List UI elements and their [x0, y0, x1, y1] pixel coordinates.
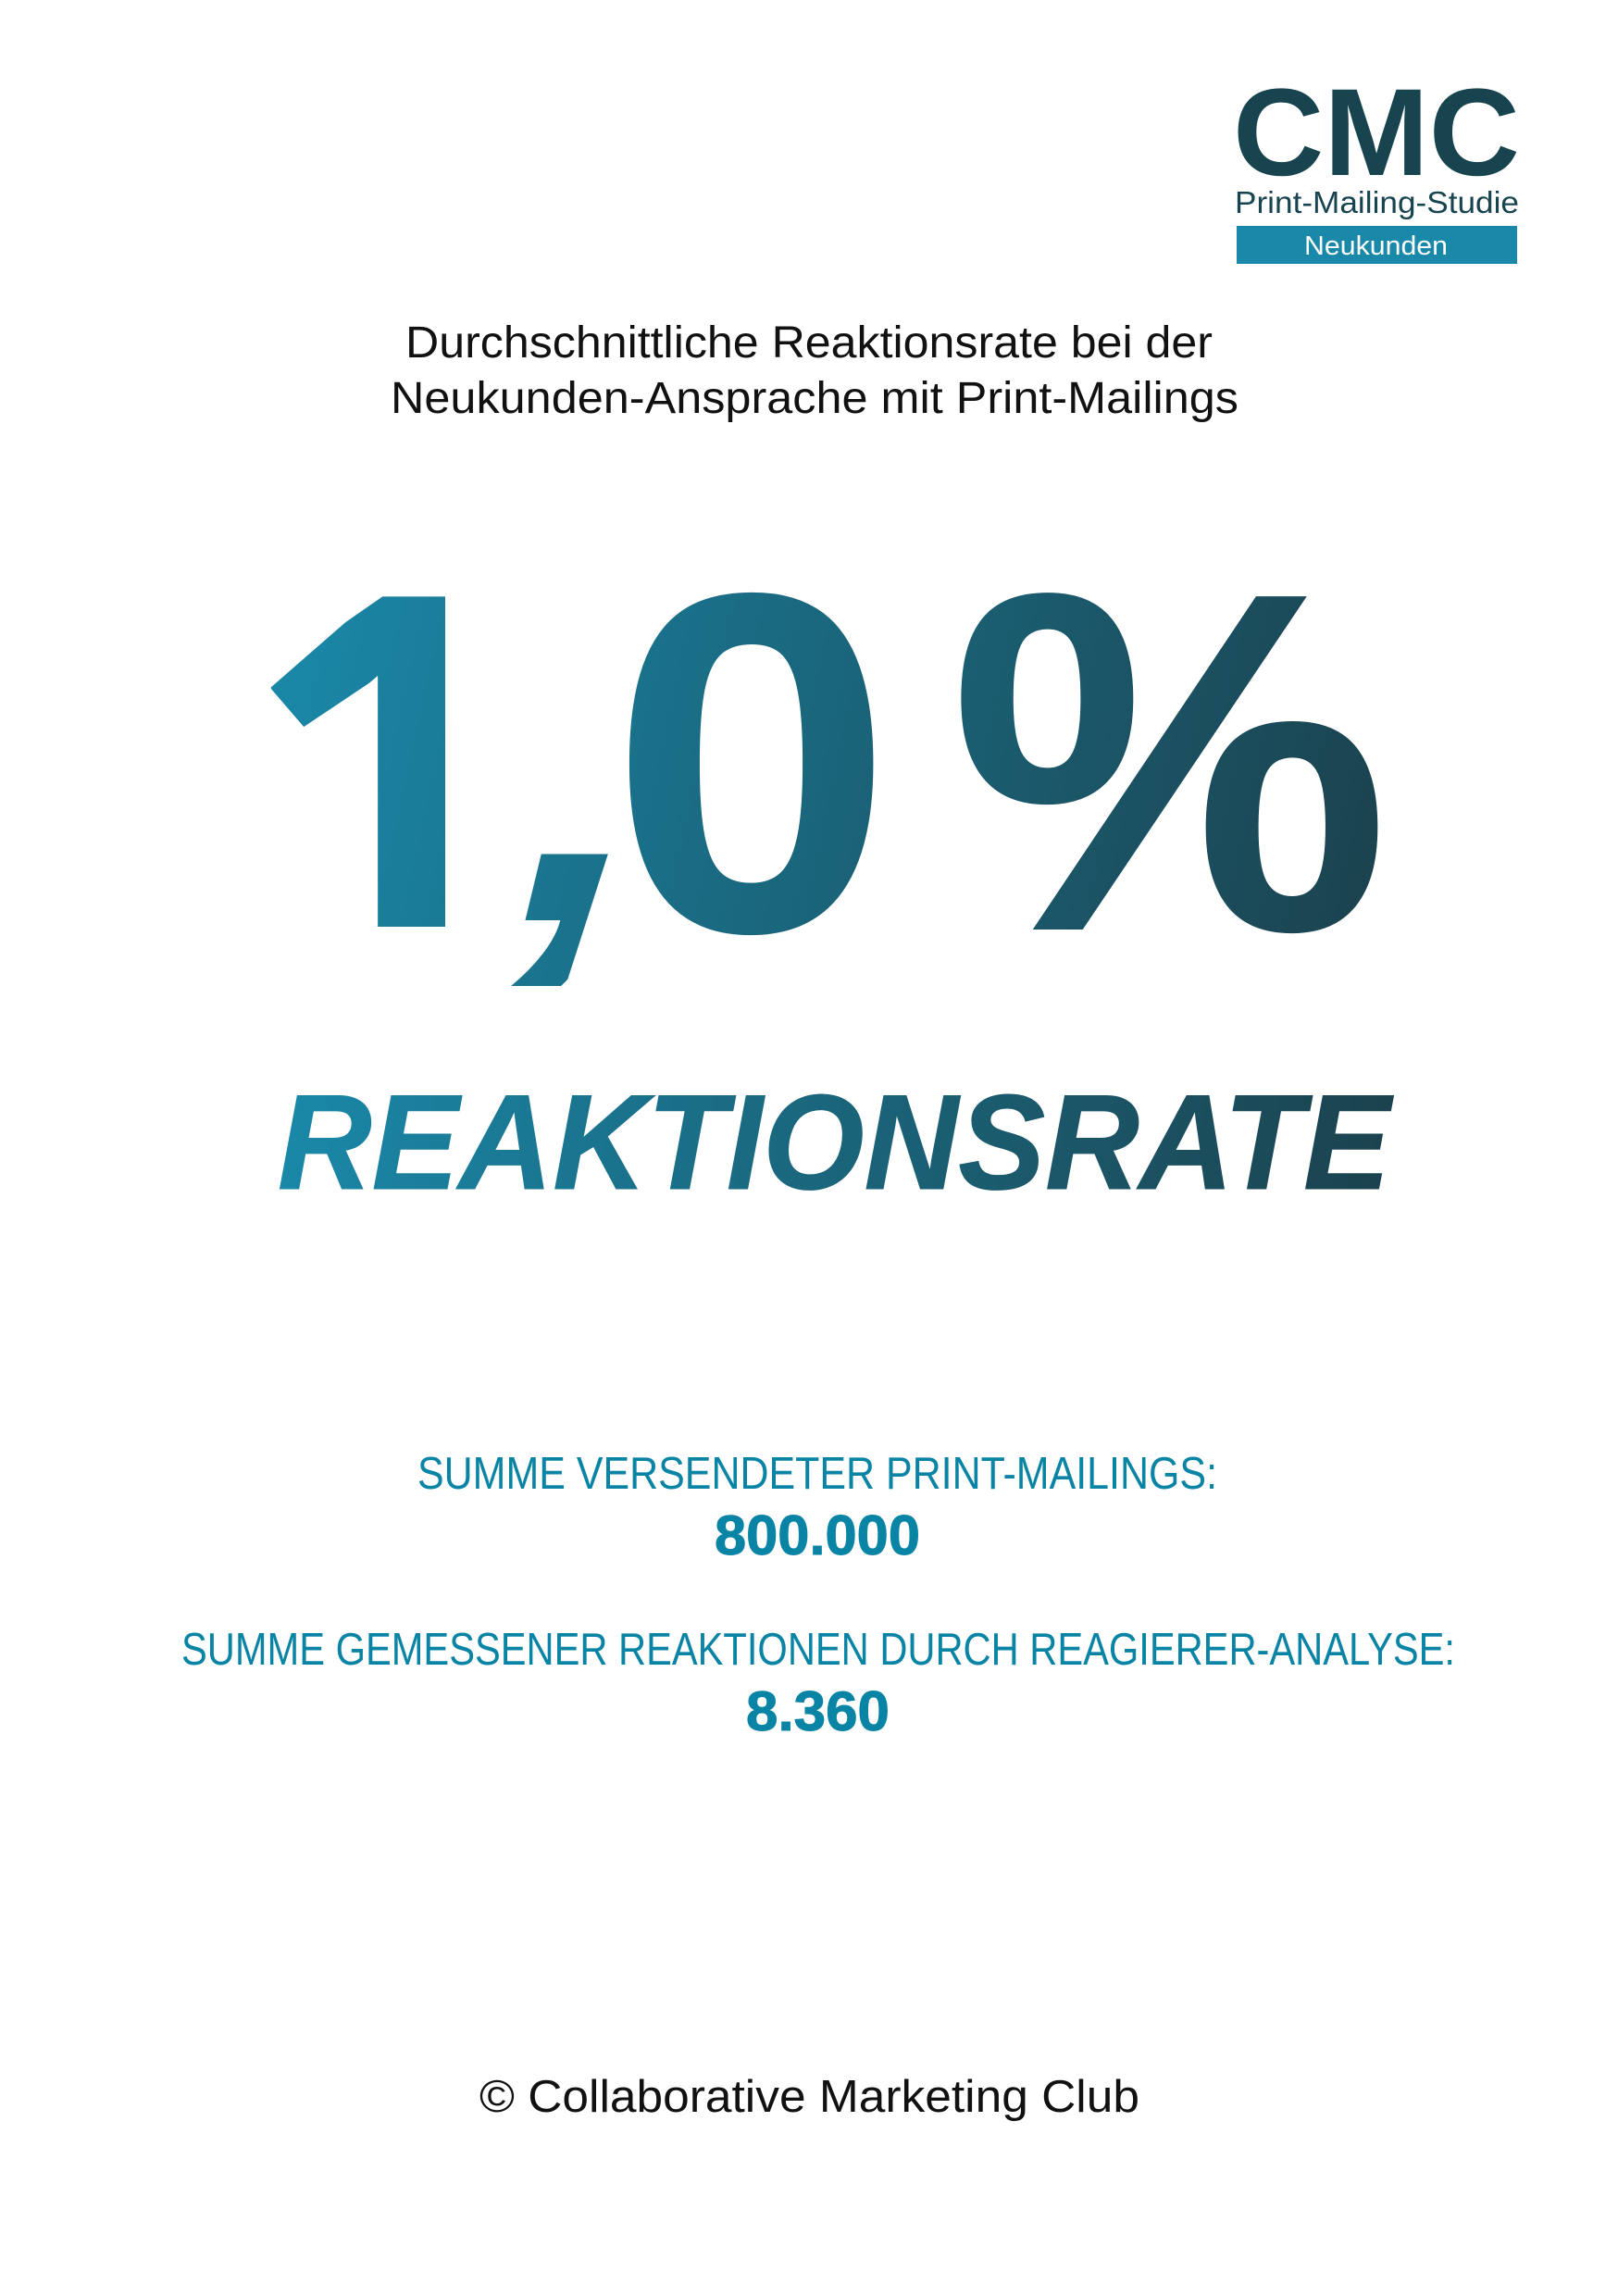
stat: versendete Print-Mailings [417, 1449, 1217, 1566]
big number: 1,0%: % [949, 492, 1390, 1032]
big number: 1,0%: , [504, 518, 667, 1015]
subtitle: Neukunden-Ansprache mit Print-Mailings [391, 374, 1238, 423]
big number: 1,0% [270, 593, 1377, 986]
logo [1233, 64, 1520, 264]
logo: Neukunden bar: Neukunden [1304, 231, 1448, 261]
copyright footer: © Collaborative Marketing Club [479, 2072, 1139, 2122]
big number: 1,0%: 0 [609, 493, 894, 1034]
stat: gemessene Reaktionen [181, 1625, 1455, 1742]
heading: REAKTIONSRATE: REAKTIONSRATE [278, 1067, 1394, 1217]
logo: Neukunden bar [1237, 226, 1517, 264]
big number: 1,0%: 1 [227, 447, 587, 1220]
logo: Print-Mailing-Studie: Print-Mailing-Studie [1235, 185, 1519, 219]
logo: CMC wordmark: CMC [1233, 64, 1520, 202]
stat: versendete Print-Mailings: SUMME VERSENDETER PRINT-MAILINGS: [417, 1449, 1217, 1499]
subtitle [391, 318, 1238, 423]
stat: versendete Print-Mailings: 800.000 [715, 1504, 920, 1566]
subtitle: Durchschnittliche Reaktionsrate bei der [405, 318, 1213, 368]
stat: gemessene Reaktionen: 8.360 [746, 1680, 890, 1742]
